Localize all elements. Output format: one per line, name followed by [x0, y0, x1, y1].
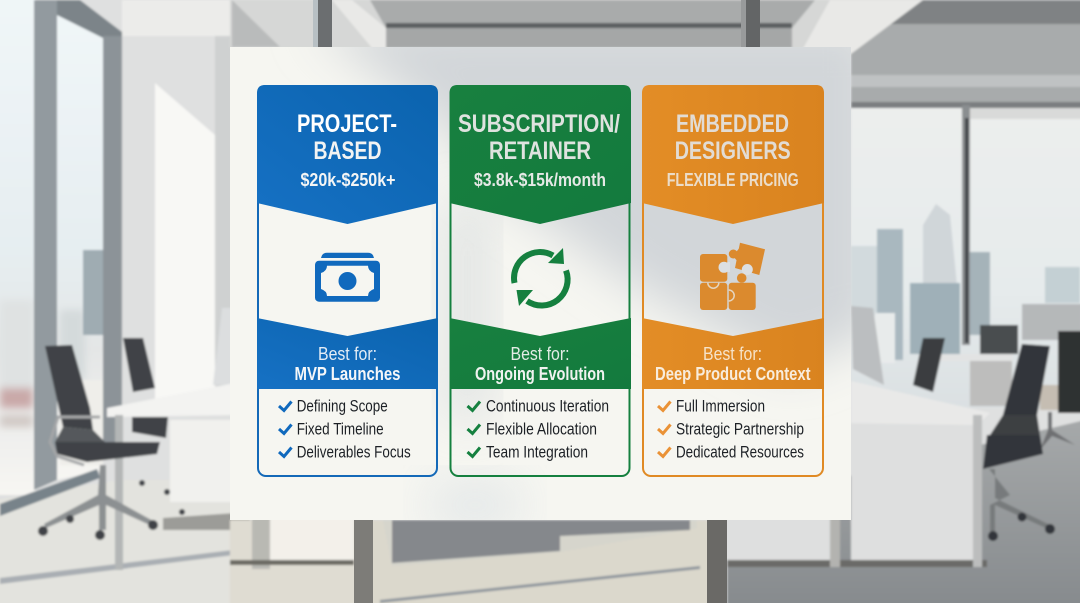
checklist: Flexible Allocation: [486, 420, 597, 438]
card outline: [258, 86, 437, 476]
price note: FLEXIBLE PRICING: [667, 170, 799, 190]
checklist: Deliverables Focus: [297, 444, 411, 462]
checklist: Defining Scope: [297, 398, 388, 416]
icon: banknotes: [315, 253, 380, 302]
support pole: bottom right: [707, 520, 727, 603]
best for label: Best for:: [510, 344, 570, 364]
left window: [0, 0, 122, 495]
header band: [642, 85, 824, 224]
heading: RETAINER: [489, 137, 591, 165]
bottom centre floor: [230, 520, 365, 603]
best for value: Deep Product Context: [655, 364, 811, 384]
support pole: top right: [741, 0, 760, 48]
heading: EMBEDDED: [676, 110, 789, 138]
right window and skyline: [851, 105, 1080, 408]
left chairs: [38, 338, 185, 540]
checklist: Strategic Partnership: [676, 420, 804, 438]
heading: SUBSCRIPTION/: [458, 110, 620, 138]
best for label: Best for:: [703, 344, 762, 364]
best for value: Ongoing Evolution: [475, 364, 605, 384]
icon: puzzle pieces: [700, 243, 765, 310]
lower band: [257, 318, 438, 389]
card: embedded designers: [642, 85, 824, 476]
support pole: top left: [313, 0, 332, 48]
best for value: MVP Launches: [294, 364, 400, 384]
price: $20k-$250k+: [300, 170, 396, 190]
heading: DESIGNERS: [675, 137, 791, 165]
header band: [257, 85, 438, 224]
checklist: Continuous Iteration: [486, 398, 609, 416]
price: $3.8k-$15k/month: [474, 170, 606, 190]
header band: [450, 85, 631, 224]
left desk: [107, 308, 235, 570]
best for label: Best for:: [318, 344, 377, 364]
heading: [297, 110, 397, 165]
ceiling centre: [230, 0, 850, 48]
white sign board: [230, 47, 851, 520]
checklist: [279, 398, 411, 462]
heading: [458, 110, 620, 165]
lower band: [450, 318, 631, 389]
heading: BASED: [314, 137, 382, 165]
right desks and monitors: [830, 304, 1080, 567]
checklist: Team Integration: [486, 444, 588, 462]
left floor: [0, 480, 235, 603]
checklist: [658, 398, 804, 462]
right floor: [727, 420, 1080, 603]
card outline: [450, 86, 630, 476]
right ceiling: [800, 0, 1080, 108]
card: project-based: [257, 85, 438, 476]
checklist: Dedicated Resources: [676, 444, 804, 462]
heading: PROJECT-: [297, 110, 397, 138]
wall and light patch: [122, 0, 232, 36]
heading: [675, 110, 791, 165]
lower band: [642, 318, 824, 389]
checklist: Fixed Timeline: [297, 420, 384, 438]
card: subscription / retainer: [450, 85, 631, 476]
card outline: [643, 86, 823, 476]
support pole: bottom left: [354, 520, 373, 603]
checklist: Full Immersion: [676, 398, 765, 416]
checklist: [468, 398, 609, 462]
icon: circular arrows: [514, 248, 568, 306]
right chairs: [983, 331, 1080, 541]
